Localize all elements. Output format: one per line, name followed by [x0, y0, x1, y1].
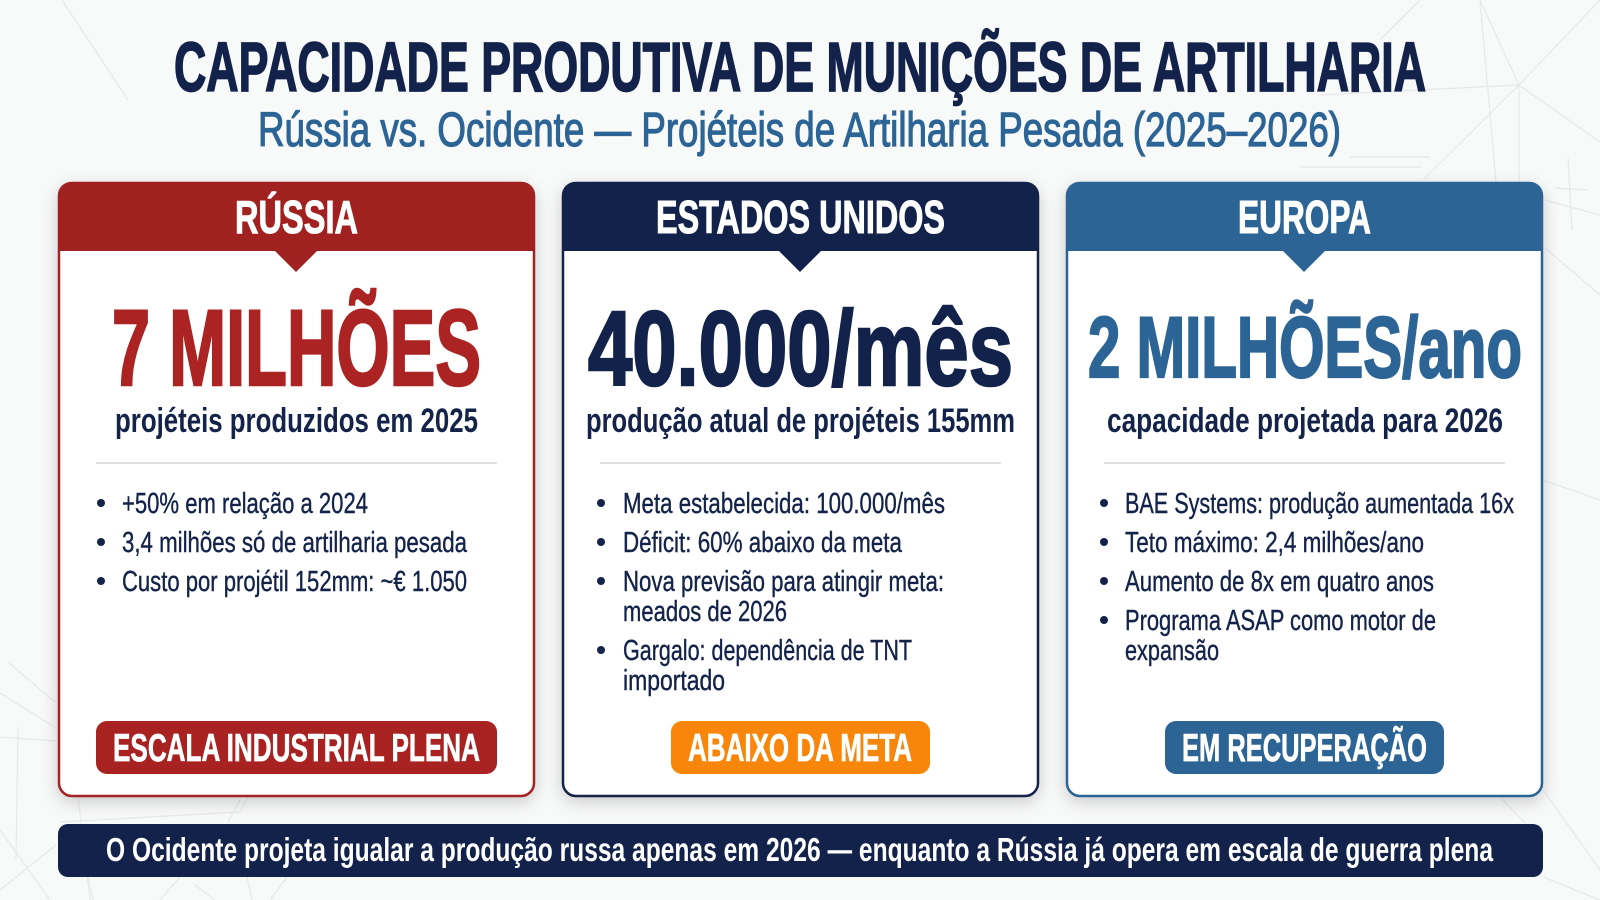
bullet list: Teto máximo: 2,4 milhões/ano: [1125, 527, 1424, 559]
panel: Estados Unidos: [562, 182, 1039, 796]
panel header: Europa: [1066, 182, 1543, 272]
panel header: Rússia: RÚSSIA: [235, 191, 358, 243]
status badge: ABAIXO DA META: [688, 727, 912, 770]
bullet list: [1100, 488, 1514, 667]
status badge: EM RECUPERAÇÃO: [1182, 726, 1427, 770]
bullet list: Déficit: 60% abaixo da meta: [623, 527, 903, 559]
panel: Europa: [1066, 182, 1543, 796]
big number: 7 milhões: 7 MILHÕES: [112, 287, 481, 408]
bullet list: Aumento de 8x em quatro anos: [1125, 566, 1434, 598]
metric caption: produção atual de projéteis 155mm: [586, 402, 1015, 440]
status badge: ESCALA INDUSTRIAL PLENA: [113, 727, 480, 770]
bullet list: Programa ASAP como motor de: [1125, 605, 1436, 637]
bullet list: importado: [623, 665, 725, 697]
metric caption: projéteis produzidos em 2025: [115, 402, 478, 440]
bullet list: +50% em relação a 2024: [122, 488, 368, 520]
panel header: Estados Unidos: [562, 182, 1039, 272]
bullet list: [597, 488, 945, 697]
bullet list: meados de 2026: [623, 596, 787, 628]
bullet list: Nova previsão para atingir meta:: [623, 566, 944, 598]
panel header: Europa: EUROPA: [1238, 191, 1371, 243]
panel: Rússia: [58, 182, 535, 796]
bullet list: [97, 488, 468, 598]
bullet list: Custo por projétil 152mm: ~€ 1.050: [122, 566, 467, 598]
status badge: [1165, 721, 1444, 774]
conclusion banner: [58, 824, 1543, 877]
big number: 40.000/mês: 40.000/mês: [588, 290, 1013, 408]
status badge: [671, 721, 930, 774]
status badge: [96, 721, 497, 774]
panel header: Estados Unidos: ESTADOS UNIDOS: [656, 191, 945, 243]
bullet list: Meta estabelecida: 100.000/mês: [623, 488, 945, 520]
bullet list: expansão: [1125, 635, 1219, 667]
panel header: Rússia: [58, 182, 535, 272]
bullet list: 3,4 milhões só de artilharia pesada: [122, 527, 468, 559]
bullet list: Gargalo: dependência de TNT: [623, 635, 912, 667]
